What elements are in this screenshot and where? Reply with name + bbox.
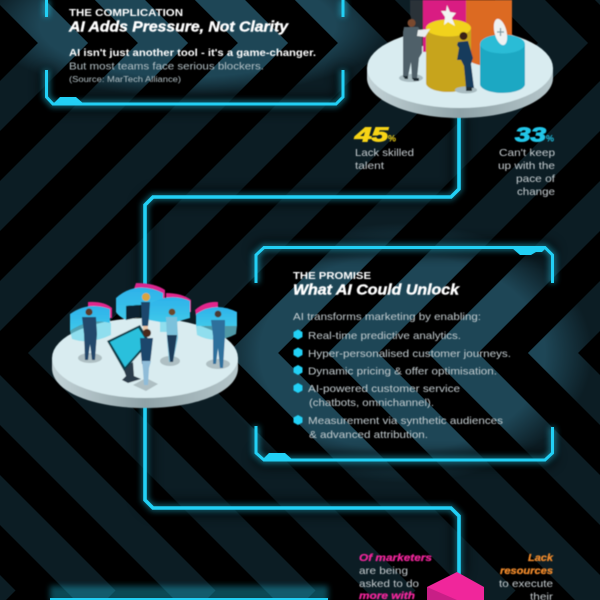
stat: 45 percent bbox=[354, 124, 414, 172]
icon: pink hexagon bbox=[427, 572, 484, 600]
person: back figure bbox=[410, 0, 425, 47]
screen: right bbox=[195, 302, 237, 340]
bullet: measurement: & advanced attribution. bbox=[309, 429, 428, 441]
person: man centre bbox=[160, 309, 180, 366]
cylinder: yellow bbox=[426, 20, 471, 92]
stat: 33 percent bbox=[498, 124, 555, 198]
connector: platform to platform bbox=[145, 112, 459, 335]
cylinder: magenta bbox=[423, 0, 467, 52]
platform base bbox=[367, 28, 553, 118]
stat: 45 percent: talent bbox=[355, 160, 384, 172]
stat: 33 percent: up with the bbox=[498, 160, 555, 172]
bullet list: promise bbox=[294, 330, 511, 441]
callout: lack resources bbox=[499, 552, 554, 600]
heading: promise: THE PROMISE bbox=[293, 270, 371, 282]
text block: complication: AI isn't just another tool - it's a game-changer. bbox=[69, 47, 316, 59]
stat: 33 percent: pace of bbox=[516, 173, 555, 185]
stat: 33 percent: % bbox=[546, 134, 554, 144]
stat: 33 percent: 33 bbox=[515, 124, 546, 146]
person: man right bbox=[206, 311, 230, 369]
screen: centre back bbox=[116, 283, 165, 320]
callout: of marketers bbox=[359, 552, 432, 600]
screen: centre right bbox=[149, 293, 191, 332]
stat: 45 percent: % bbox=[388, 134, 396, 144]
platform base bbox=[52, 318, 238, 408]
text block: complication: (Source: MarTech Alliance) bbox=[69, 75, 181, 84]
connector line shadow bbox=[47, 70, 553, 575]
icon: disc bbox=[491, 17, 510, 47]
panel: the promise bbox=[256, 248, 552, 460]
illustration: platform with holographic screens bbox=[52, 283, 238, 408]
illustration: platform with cylinders and people bbox=[367, 0, 553, 118]
frame: promise bbox=[256, 248, 552, 460]
connector: platform to hexagon bbox=[145, 400, 459, 575]
stat: 33 percent: change bbox=[517, 186, 555, 198]
person: man in grey suit bbox=[399, 19, 430, 82]
heading bar glow: next panel bbox=[50, 586, 328, 600]
person: woman in navy suit bbox=[455, 32, 477, 94]
icon: star bbox=[441, 5, 456, 26]
screen: left bbox=[70, 302, 112, 341]
stat: 33 percent: Can't keep bbox=[499, 147, 555, 159]
bullet: customer service bbox=[294, 383, 460, 409]
person: woman at kiosk bbox=[133, 329, 158, 391]
heading: complication: AI Adds Pressure, Not Clarity bbox=[68, 20, 289, 36]
person: man left bbox=[78, 308, 102, 363]
callout: lack resources: resources bbox=[500, 565, 553, 577]
cylinder: orange bbox=[466, 0, 512, 66]
bullet: customer service: AI-powered customer service bbox=[308, 383, 460, 395]
person: woman back bbox=[141, 293, 150, 331]
cylinder: teal bbox=[480, 34, 525, 93]
callout: of marketers: Of marketers bbox=[359, 552, 432, 564]
callout: lack resources: Lack bbox=[528, 552, 554, 564]
heading: complication: THE COMPLICATION bbox=[69, 7, 183, 19]
heading: promise: What AI Could Unlock bbox=[293, 282, 460, 298]
callout: lack resources: to execute bbox=[499, 578, 553, 590]
bullet: customer service: (chatbots, omnichannel). bbox=[309, 397, 434, 409]
stat: 45 percent: 45 bbox=[354, 124, 389, 146]
frame: complication bbox=[46, 0, 343, 104]
heading: promise bbox=[293, 270, 460, 298]
text block: complication: But most teams face serious blockers. bbox=[69, 60, 264, 72]
bullet: measurement: Measurement via synthetic audiences bbox=[308, 415, 503, 427]
text block: complication bbox=[69, 47, 316, 84]
callout: of marketers: asked to do bbox=[359, 578, 419, 590]
bullet: dynamic pricing: Dynamic pricing & offer optimisation. bbox=[308, 366, 497, 378]
stat: 45 percent: Lack skilled bbox=[355, 147, 414, 159]
bullet: real-time analytics: Real-time predictive analytics. bbox=[308, 330, 461, 342]
heading: complication bbox=[68, 7, 289, 36]
text block: promise intro: AI transforms marketing by enabling: bbox=[293, 311, 481, 323]
bullet: customer journeys: Hyper-personalised customer journeys. bbox=[308, 348, 511, 360]
bullet: measurement bbox=[294, 415, 503, 441]
callout: of marketers: are being bbox=[359, 565, 408, 577]
monitor: touch screen kiosk bbox=[107, 325, 150, 383]
panel: the complication bbox=[46, 0, 343, 104]
